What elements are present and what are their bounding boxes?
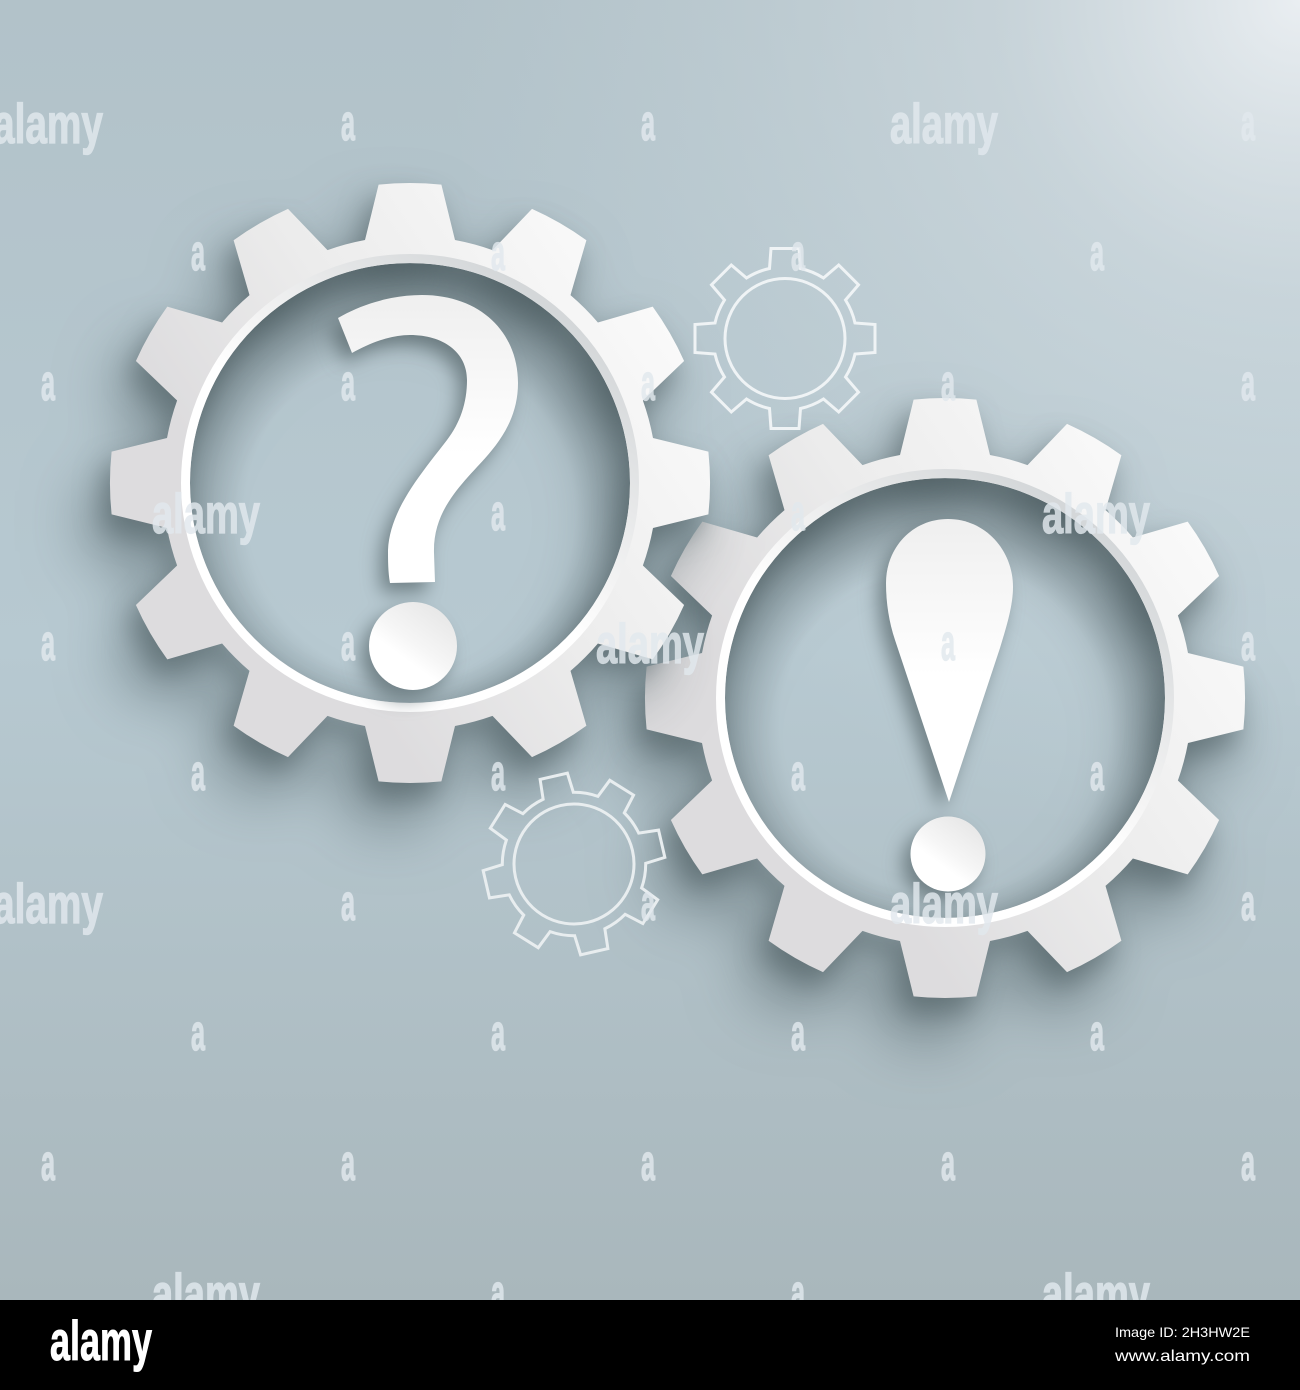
outline gear: upper small xyxy=(695,248,875,428)
watermark: repeated small a marks: a xyxy=(641,874,655,931)
question mark xyxy=(338,295,518,690)
watermark: repeated small a marks: a xyxy=(1241,354,1255,411)
hole shading xyxy=(189,262,631,704)
hole shading xyxy=(724,477,1166,919)
watermark: repeated small a marks: a xyxy=(341,1134,355,1191)
watermark: repeated small a marks: a xyxy=(341,874,355,931)
watermark: repeated small a marks: a xyxy=(1090,1004,1104,1061)
watermark: repeated small a marks: a xyxy=(491,224,505,281)
watermark: repeated small a marks: a xyxy=(341,354,355,411)
watermark: repeated alamy logos: alamy xyxy=(1042,482,1150,545)
watermark: repeated small a marks: a xyxy=(341,94,355,151)
watermark: repeated alamy logos: alamy xyxy=(596,612,704,675)
watermark: repeated alamy logos: alamy xyxy=(152,482,260,545)
watermark: repeated small a marks: a xyxy=(191,224,205,281)
watermark: repeated alamy logos xyxy=(0,92,1150,1325)
watermark: repeated small a marks: a xyxy=(641,354,655,411)
watermark: repeated small a marks: a xyxy=(1241,94,1255,151)
outline gear: lower small xyxy=(466,756,682,972)
watermark: repeated small a marks: a xyxy=(791,1004,805,1061)
watermark: repeated small a marks: a xyxy=(341,614,355,671)
watermark: repeated small a marks: a xyxy=(191,744,205,801)
watermark: repeated small a marks: a xyxy=(941,354,955,411)
watermark: repeated small a marks: a xyxy=(1090,224,1104,281)
watermark: repeated alamy logos: alamy xyxy=(890,92,998,155)
watermark: repeated small a marks: a xyxy=(791,484,805,541)
watermark: repeated small a marks: a xyxy=(41,1134,55,1191)
watermark: repeated small a marks: a xyxy=(491,1264,505,1321)
image id text: Image ID: 2H3HW2E xyxy=(1115,1324,1250,1340)
watermark: repeated small a marks: a xyxy=(641,94,655,151)
watermark: repeated small a marks: a xyxy=(41,354,55,411)
watermark: repeated alamy logos: alamy xyxy=(890,872,998,935)
watermark: repeated small a marks: a xyxy=(1241,1134,1255,1191)
watermark: repeated small a marks: a xyxy=(1241,614,1255,671)
gear body xyxy=(645,398,1245,998)
watermark: repeated small a marks: a xyxy=(941,1134,955,1191)
watermark: repeated small a marks: a xyxy=(641,1134,655,1191)
watermark: repeated small a marks: a xyxy=(491,744,505,801)
watermark: repeated small a marks: a xyxy=(491,484,505,541)
gear body xyxy=(110,183,710,783)
watermark: repeated alamy logos: alamy xyxy=(1042,1262,1150,1325)
watermark: repeated small a marks: a xyxy=(191,1004,205,1061)
watermark: repeated alamy logos: alamy xyxy=(152,1262,260,1325)
watermark: repeated small a marks: a xyxy=(791,224,805,281)
watermark: repeated small a marks: a xyxy=(791,744,805,801)
gear: question mark xyxy=(110,183,710,783)
watermark: repeated small a marks: a xyxy=(1241,874,1255,931)
exclamation mark xyxy=(886,519,1013,892)
website text: www.alamy.com xyxy=(1114,1348,1250,1365)
watermark: repeated small a marks: a xyxy=(1090,744,1104,801)
footer logo: alamy xyxy=(50,1309,152,1372)
watermark: repeated small a marks: a xyxy=(791,1264,805,1321)
watermark: repeated small a marks: a xyxy=(491,1004,505,1061)
watermark: repeated small a marks: a xyxy=(941,614,955,671)
gear: exclamation mark xyxy=(645,398,1245,998)
watermark: repeated small a marks: a xyxy=(41,614,55,671)
footer bar xyxy=(0,1300,1300,1390)
